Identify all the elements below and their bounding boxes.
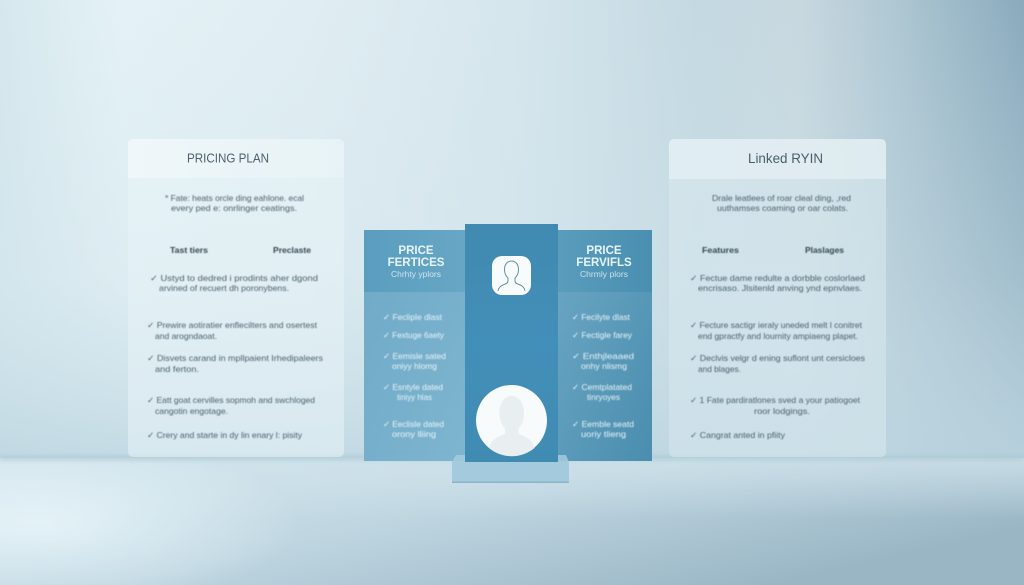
text block: intro: every ped e: onrlinger ceatings. — [171, 203, 297, 213]
feature list — [690, 273, 865, 440]
table headings: Preclaste — [273, 245, 311, 255]
column title: Chrhty yplors — [391, 269, 441, 279]
panel: linked ryin — [669, 139, 886, 457]
feature list: ✓ Eemble seatd — [572, 419, 634, 429]
feature list: ✓ Enthjleaaed — [572, 351, 634, 361]
text block: intro: Drale leatlees of roar cleal ding, ,red — [712, 193, 851, 203]
panel header — [128, 139, 344, 178]
column title: FERTICES — [388, 257, 445, 269]
table headings: Tast tiers — [170, 245, 208, 255]
column title: FERVIFLS — [576, 257, 632, 269]
feature list: oniyy hlomg — [392, 361, 437, 371]
text block: intro: uuthamses coaming or oar colats. — [717, 203, 848, 213]
feature list: ✓ Eatt goat cervilles sopmoh and swchloged — [147, 395, 315, 405]
column title: PRICE — [398, 245, 434, 257]
feature list: ✓ Cangrat anted in pfiity — [690, 430, 786, 440]
feature list: ✓ Crery and starte in dy lin enary l: pisity — [147, 430, 303, 440]
feature list: arvined of recuert dh poronybens. — [159, 283, 289, 293]
feature list — [572, 312, 634, 439]
column header — [557, 230, 652, 292]
panel header — [669, 139, 886, 179]
feature list: ✓ Fectigle farey — [572, 330, 633, 340]
feature list: roor lodgings. — [754, 406, 810, 416]
feature list: ✓ Cemtplatated — [572, 382, 632, 392]
feature list: ✓ Fecture sactigr ieraly uneded melt l conitret — [690, 320, 863, 330]
heading: linked ryin: Linked RYIN — [748, 151, 823, 166]
table headings: Plaslages — [805, 245, 844, 255]
column title — [388, 245, 445, 279]
feature list: ✓ Fecliple dlast — [383, 312, 443, 322]
feature list: and ferton. — [155, 364, 199, 374]
feature list: ✓ Eeclisle dated — [383, 419, 444, 429]
panel: pricing plan — [128, 139, 344, 457]
feature list: ✓ 1 Fate pardiratlones sved a your patiogoet — [690, 395, 861, 405]
column: center profile — [465, 224, 558, 462]
feature list: end gpractfy and lournity ampiaeng plapet. — [698, 331, 858, 341]
icon: avatar circle — [476, 385, 547, 456]
column: right pricing — [557, 230, 652, 461]
feature list: orony lliing — [392, 429, 436, 439]
background wall — [0, 0, 1024, 460]
feature list — [147, 273, 323, 440]
feature list: ✓ Disvets carand in mpllpaient Irhedipaleers — [147, 353, 323, 363]
column title: PRICE — [586, 245, 622, 257]
column title: Chrmly plors — [580, 269, 628, 279]
icon: user outline — [492, 256, 531, 295]
heading: pricing plan: PRICING PLAN — [187, 152, 269, 166]
feature list: uoriy tlieng — [581, 429, 626, 439]
column: left pricing — [364, 230, 466, 461]
feature list: ✓ Fecilyte dlast — [572, 312, 631, 322]
text block: intro — [165, 193, 304, 213]
table headings — [702, 245, 844, 255]
feature list: ✓ Fectue dame redulte a dorbble coslorlaed — [690, 273, 865, 283]
text block: intro: * Fate: heats orcle ding eahlone. ecal — [165, 193, 304, 203]
feature list — [383, 312, 446, 439]
feature list: tiniyy hlas — [397, 392, 432, 402]
feature list: cangotin engotage. — [155, 406, 228, 416]
feature list: encrisaso. Jlsitenld anving ynd epnvlaes. — [698, 283, 862, 293]
column header — [364, 230, 466, 292]
feature list: onhy nlismg — [581, 361, 627, 371]
feature list: ✓ Declvis velgr d ening suflont unt cersicloes — [690, 353, 865, 363]
feature list: tinryoyes — [587, 392, 620, 402]
feature list: ✓ Fextuge 6aety — [383, 330, 445, 340]
floor — [0, 456, 1024, 585]
feature list: ✓ Eemisle sated — [383, 351, 446, 361]
column title — [576, 245, 632, 279]
feature list: ✓ Esntyle dated — [383, 382, 443, 392]
feature list: and arogndaoat. — [155, 331, 217, 341]
feature list: ✓ Ustyd to dedred i prodints aher dgond — [150, 273, 318, 283]
feature list: and blages. — [698, 364, 741, 374]
pedestal — [452, 455, 569, 483]
table headings: Features — [702, 245, 739, 255]
text block: intro — [712, 193, 851, 213]
table headings — [170, 245, 311, 255]
feature list: ✓ Prewire aotiratier enflecilters and osertest — [147, 320, 318, 330]
